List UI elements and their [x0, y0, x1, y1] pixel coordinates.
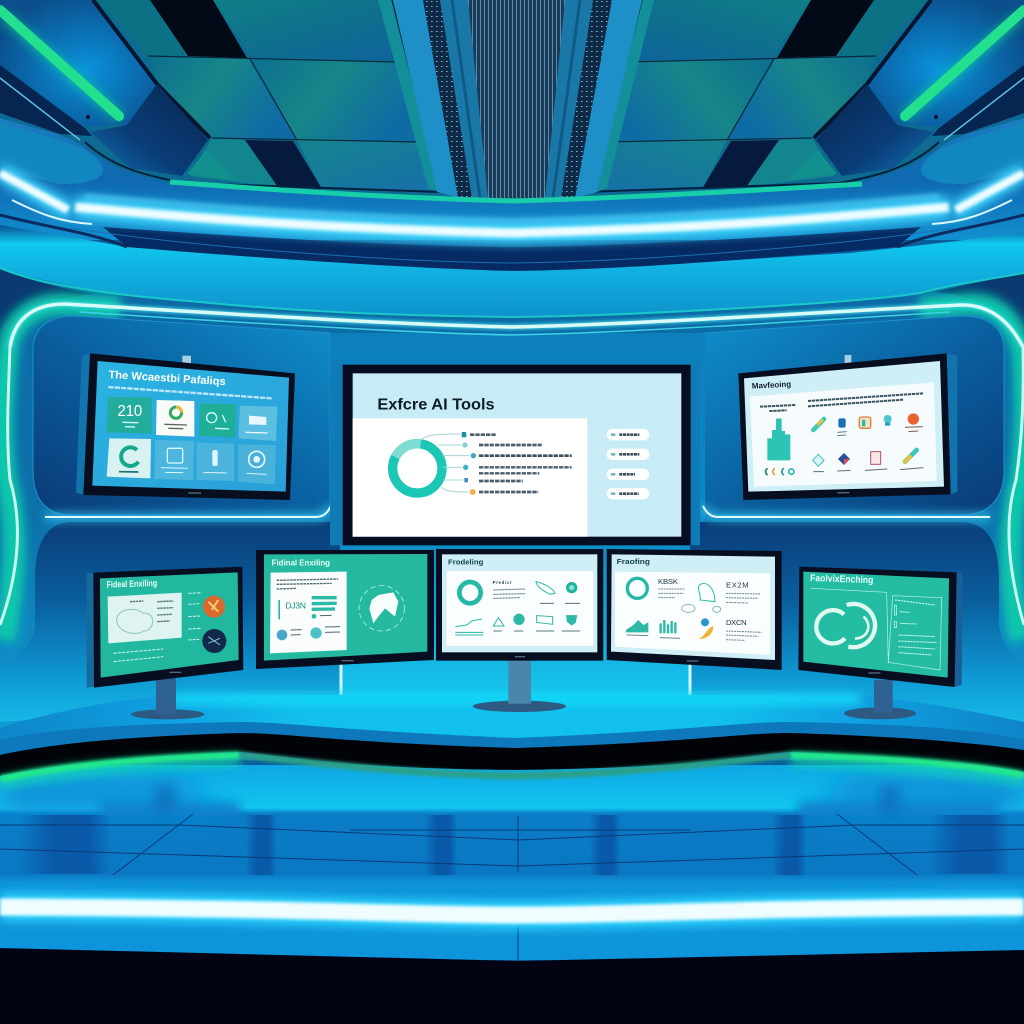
white glowing band: [75, 207, 949, 233]
orange circle image: [203, 596, 225, 618]
ceiling panels and corner housings: [0, 0, 1024, 240]
small heading: Predict: [493, 580, 512, 585]
screen title: Fraofing: [617, 557, 650, 566]
screen title: Frodeling: [448, 557, 483, 566]
wall: upper right panel: [704, 316, 1004, 515]
monitor: bottom far right, FaolvixEnching: [798, 567, 963, 719]
screen title: Exfcre AI Tools: [377, 396, 495, 413]
monitor: centre, Exfcre AI Tools: [330, 360, 700, 545]
stand and base: [473, 658, 566, 712]
outer wall edge: [0, 268, 1024, 760]
screen title: Mavfeoing: [752, 380, 792, 391]
icon row 2: [813, 450, 923, 472]
wall light lines: [0, 304, 1024, 695]
green accent strip: [170, 182, 862, 201]
diagram card: [108, 593, 182, 643]
stand and base: [131, 677, 204, 719]
monitor: bottom second, Fidinal Enxiling: [256, 550, 434, 669]
donut chart: [459, 582, 481, 603]
card: green icon: [199, 403, 236, 438]
monitor: bottom far left, Fideal Enxiling: [87, 567, 243, 719]
ring diagram: [816, 604, 875, 647]
charts and figures: [626, 584, 762, 640]
navy corner wedges: [0, 268, 1024, 360]
stat labels: [658, 577, 749, 627]
wall: lower left panel: [0, 522, 340, 722]
stat labels: EX2M: [726, 581, 749, 590]
world globe: [359, 586, 404, 631]
wall: upper left panel: [33, 316, 330, 515]
side pill buttons: [607, 429, 649, 499]
ceiling vent: [378, 0, 654, 198]
stand and base: [844, 680, 916, 719]
card: figure icon: [197, 443, 234, 481]
upper light bands: [0, 172, 1024, 317]
bar chart: [767, 418, 790, 460]
navy circle image: [202, 629, 226, 653]
tool list: [462, 432, 572, 495]
stat labels: DXCN: [726, 618, 747, 627]
monitor: top left, The Wcaestbi Pafaliqs: [76, 353, 295, 500]
donut chart: [627, 578, 647, 598]
notes box: [888, 596, 942, 670]
card: round icon: [238, 444, 276, 484]
card: progress ring: [107, 438, 151, 478]
green under-desk light: [0, 755, 1024, 784]
connector lines: [421, 434, 469, 492]
legend glyphs: [766, 468, 794, 475]
teal glow around wall frame: [2, 304, 1024, 640]
monitor: bottom centre, Frodeling: [436, 549, 603, 712]
card: 210: [107, 397, 152, 433]
stat labels: KBSK: [658, 577, 679, 586]
screen title: FaolvixEnching: [810, 573, 874, 586]
monitor: top right, Mavfeoing: [738, 353, 957, 500]
lit strip above white band: [85, 196, 939, 221]
white card: [270, 572, 347, 653]
detail icons: [455, 582, 580, 635]
monitor: bottom right, Fraofing: [607, 549, 782, 670]
wall: lower right panel: [690, 522, 1024, 722]
screen title: The Wcaestbi Pafaliqs: [108, 369, 226, 388]
floor: [0, 765, 1024, 960]
dark floor foreground: [0, 948, 1024, 1024]
white card: DJ3N: [285, 600, 306, 610]
wall: centre column: [330, 333, 705, 695]
black desk underside: [0, 733, 1024, 776]
donut chart: [393, 444, 442, 493]
card: blueprint icon: [154, 440, 194, 480]
screen title: Fideal Enxiling: [106, 578, 157, 590]
screen title: Fidinal Enxiling: [272, 558, 330, 568]
card: device icon: [238, 406, 277, 441]
side light bars: [0, 172, 1024, 224]
icon row 1: [813, 413, 923, 436]
desk surface: [0, 695, 1024, 760]
card: white icon: [156, 400, 194, 437]
floor white light strip: [0, 907, 1024, 915]
card: 210: 210: [117, 403, 142, 420]
